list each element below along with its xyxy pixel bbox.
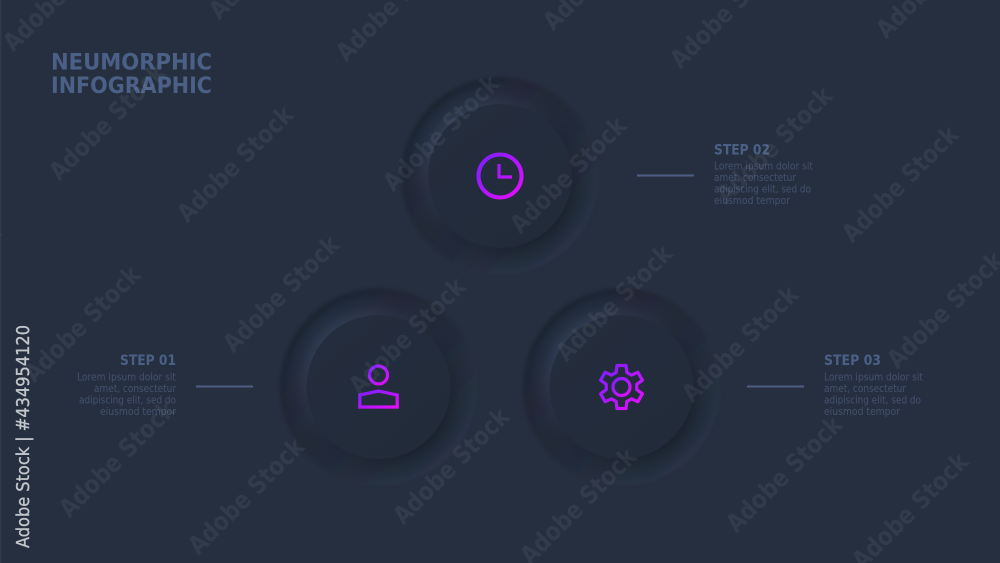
title: INFOGRAPHIC [51, 74, 212, 99]
connector: step 03 [747, 386, 804, 388]
panel: step 01 circle [280, 288, 458, 466]
stock watermarks: Adobe Stock [18, 259, 147, 388]
text block: step 03 [824, 353, 923, 418]
stock watermarks: Adobe Stock [53, 394, 182, 523]
connector: step 02 [637, 174, 694, 176]
connector: step 01 [196, 386, 253, 388]
text block: step 02: amet, consectetur [714, 172, 797, 184]
text block: step 01 [77, 353, 177, 418]
title [51, 50, 212, 99]
text block: step 01: STEP 01 [120, 353, 176, 369]
text block: step 03: eiusmod tempor [824, 406, 901, 418]
stock watermarks: Adobe Stock [836, 119, 965, 248]
text block: step 01: eiusmod tempor [100, 406, 177, 418]
text block: step 02: Lorem ipsum dolor sit [714, 160, 813, 172]
stock watermarks: Adobe Stock [720, 409, 849, 538]
text block: step 02: eiusmod tempor [714, 195, 791, 207]
stock watermarks: Adobe Stock [171, 99, 300, 228]
icon: clock [478, 154, 522, 198]
stock watermarks: Adobe Stock [377, 68, 506, 197]
stock watermarks: Adobe Stock [550, 238, 679, 367]
title: NEUMORPHIC [51, 50, 212, 76]
text block: step 03: Lorem ipsum dolor sit [824, 372, 923, 384]
text block: step 02 [714, 142, 813, 207]
icon: gear [601, 365, 642, 409]
panel: step 03 circle [523, 288, 701, 466]
stock watermarks: Adobe Stock [387, 401, 516, 530]
stock watermarks: Adobe Stock [43, 57, 172, 186]
text block: step 02: STEP 02 [714, 142, 770, 158]
stock watermarks: Adobe Stock [676, 279, 805, 408]
stock watermarks: Adobe Stock [504, 110, 633, 239]
text block: step 01: amet, consectetur [94, 383, 177, 395]
text block: step 01: Lorem ipsum dolor sit [77, 372, 176, 384]
text block: step 03: STEP 03 [824, 353, 881, 369]
stock watermarks: Adobe Stock [343, 271, 472, 400]
stock watermarks: Adobe Stock [217, 229, 346, 358]
stock watermarks: Adobe Stock [710, 80, 839, 209]
side credit text: Adobe Stock | #434954120 [13, 325, 34, 548]
stock watermarks: Adobe Stock [182, 431, 311, 560]
icon: person [360, 366, 397, 407]
text block: step 03: adipiscing elit, sed do [824, 394, 921, 406]
text block: step 01: adipiscing elit, sed do [79, 394, 176, 406]
panel: step 02 circle [402, 78, 580, 256]
text block: step 02: adipiscing elit, sed do [714, 184, 811, 196]
text block: step 03: amet, consectetur [824, 383, 907, 395]
